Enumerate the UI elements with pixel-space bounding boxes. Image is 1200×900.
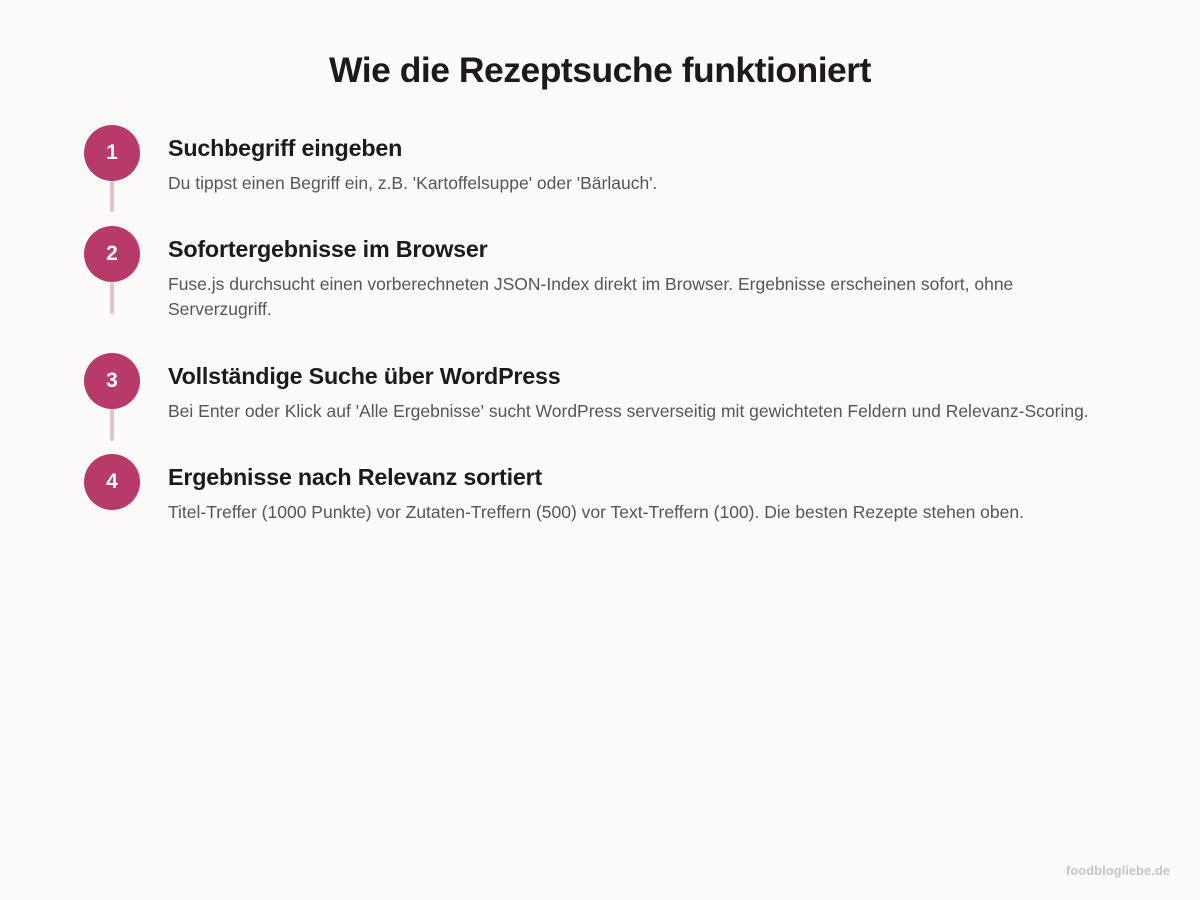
connector 3	[110, 409, 114, 441]
step 3	[84, 353, 1089, 441]
circle 2	[84, 226, 140, 282]
connector 1	[110, 181, 114, 212]
heading 1: Suchbegriff eingeben	[168, 135, 402, 161]
text 1: Du tippst einen Begriff ein, z.B. 'Kartoffelsuppe' oder 'Bärlauch'.	[168, 173, 657, 193]
circle 2: 2	[106, 242, 118, 265]
circle 4	[84, 454, 140, 510]
circle 1	[84, 125, 140, 181]
text 4: Titel-Treffer (1000 Punkte) vor Zutaten-Treffern (500) vor Text-Treffern (100). Die besten Rezepte stehen oben.	[168, 502, 1024, 522]
text 3: Bei Enter oder Klick auf 'Alle Ergebnisse' sucht WordPress serverseitig mit gewichteten Feldern und Relevanz-Scoring.	[168, 401, 1089, 421]
heading 3: Vollständige Suche über WordPress	[168, 363, 561, 389]
circle 3	[84, 353, 140, 409]
step 4	[84, 454, 1024, 522]
connector 2	[110, 282, 114, 314]
heading 4: Ergebnisse nach Relevanz sortiert	[168, 464, 542, 490]
text 2: Fuse.js durchsucht einen vorberechneten JSON-Index direkt im Browser. Ergebnisse erscheinen sofort, ohne Serverzugriff.	[168, 274, 1013, 319]
step 1	[84, 125, 657, 212]
footer: foodblogliebe.de	[1066, 863, 1170, 878]
step 2	[84, 226, 1013, 319]
circle 1: 1	[106, 141, 118, 164]
heading 2: Sofortergebnisse im Browser	[168, 236, 488, 262]
circle 3: 3	[106, 369, 118, 392]
title: Wie die Rezeptsuche funktioniert	[329, 50, 871, 90]
circle 4: 4	[106, 470, 118, 493]
